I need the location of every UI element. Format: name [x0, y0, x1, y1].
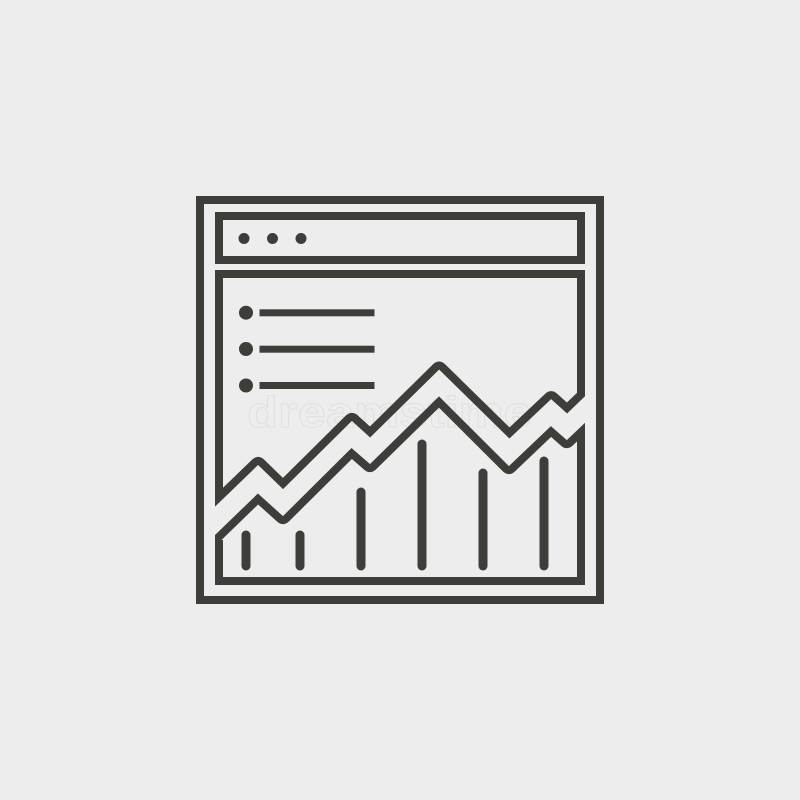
title bar frame — [219, 216, 581, 260]
bullet list — [239, 306, 374, 392]
upper content panel outline — [219, 274, 581, 498]
upper chart line — [205, 365, 595, 511]
outer window frame — [200, 200, 600, 600]
list item 3 — [239, 378, 374, 392]
lower chart panel outline — [219, 433, 581, 581]
icon: browser window with analytics chart — [196, 196, 604, 604]
window control dots — [238, 233, 306, 244]
list item 1 — [239, 306, 374, 320]
lower chart line — [205, 402, 595, 550]
bar chart — [246, 444, 544, 566]
title bar — [219, 216, 581, 260]
list item 2 — [239, 342, 374, 356]
watermark: dreamstime — [247, 388, 532, 437]
